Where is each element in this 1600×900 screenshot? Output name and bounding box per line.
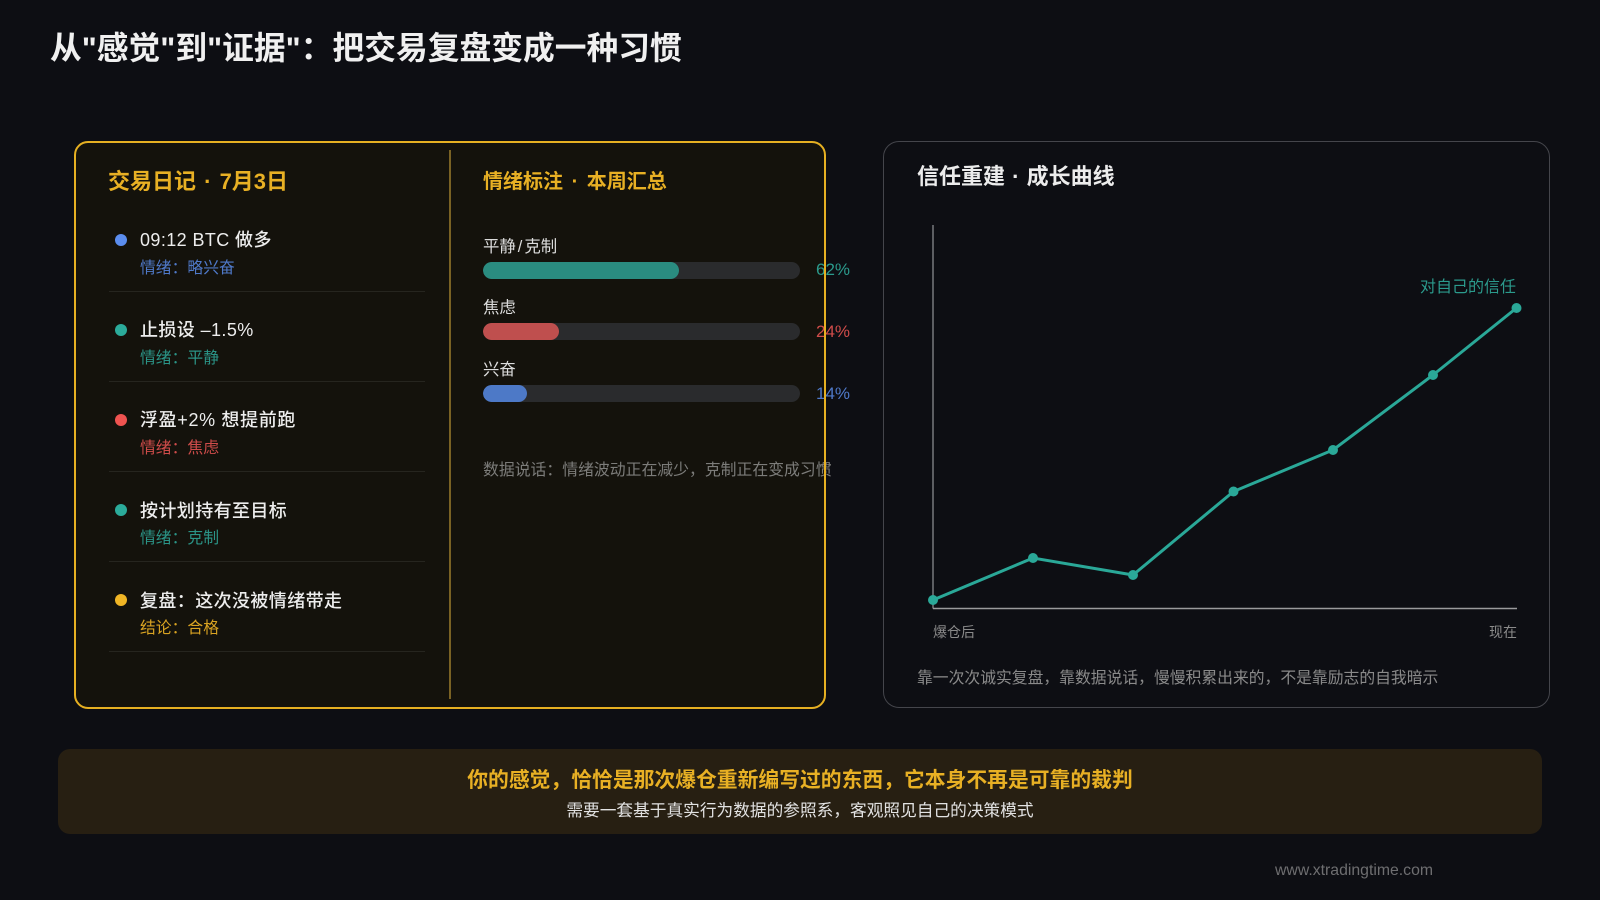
journal entry 1 <box>115 230 272 277</box>
journal entry 3 <box>115 410 296 457</box>
journal entry 5: 复盘：这次没被情绪带走 <box>140 591 342 611</box>
column divider <box>449 150 451 699</box>
journal entry 5: 结论：合格 <box>140 620 219 637</box>
bar: excitement: 兴奋 <box>483 361 516 379</box>
callout banner <box>58 749 1542 834</box>
bar: calm: 62% <box>816 260 850 279</box>
callout main line: 你的感觉，恰恰是那次爆仓重新编写过的东西，它本身不再是可靠的裁判 <box>467 769 1133 792</box>
line chart <box>928 225 1522 640</box>
trust line <box>933 308 1516 600</box>
note: data speaks: 数据说话：情绪波动正在减少，克制正在变成习惯 <box>483 462 832 479</box>
bar: excitement <box>483 360 850 403</box>
journal entry 1: 情绪：略兴奋 <box>140 260 235 277</box>
bar: calm <box>483 238 850 279</box>
journal entry 4: 情绪：克制 <box>140 530 219 547</box>
panel: trading journal and emotion summary <box>74 141 826 709</box>
bar: anxiety: 焦虑 <box>483 299 516 317</box>
data points <box>928 303 1522 605</box>
journal entry 1: 09:12 BTC 做多 <box>140 230 272 250</box>
journal entry 2: 止损设 –1.5% <box>140 320 254 340</box>
bar: anxiety: 24% <box>816 322 850 341</box>
journal entry 5 <box>115 591 342 637</box>
axis label end: 现在 <box>1489 624 1517 640</box>
journal entry 4 <box>115 501 287 547</box>
journal entry 2: 情绪：平静 <box>140 350 219 367</box>
journal entry 3: 情绪：焦虑 <box>140 440 219 457</box>
axis label start: 爆仓后 <box>933 624 975 640</box>
panel: trust growth curve <box>883 141 1550 708</box>
bar: calm: 平静/克制 <box>483 238 557 256</box>
heading: trust rebuild: 信任重建 · 成长曲线 <box>917 164 1115 188</box>
bar: anxiety <box>483 298 850 341</box>
bar: excitement: 14% <box>816 384 850 403</box>
journal entry 3: 浮盈+2% 想提前跑 <box>140 410 296 430</box>
title: 从"感觉"到"证据"：把交易复盘变成一种习惯 <box>50 30 682 66</box>
footer url: www.xtradingtime.com <box>1275 862 1433 879</box>
callout sub line: 需要一套基于真实行为数据的参照系，客观照见自己的决策模式 <box>566 801 1034 820</box>
journal entry 4: 按计划持有至目标 <box>140 501 287 521</box>
series label: 对自己的信任 <box>1420 278 1516 296</box>
heading: trading journal: 交易日记 · 7月3日 <box>108 168 288 194</box>
journal entry 2 <box>115 320 254 367</box>
heading: emotion summary: 情绪标注 · 本周汇总 <box>483 171 667 193</box>
caption: 靠一次次诚实复盘，靠数据说话，慢慢积累出来的，不是靠励志的自我暗示 <box>917 670 1438 686</box>
